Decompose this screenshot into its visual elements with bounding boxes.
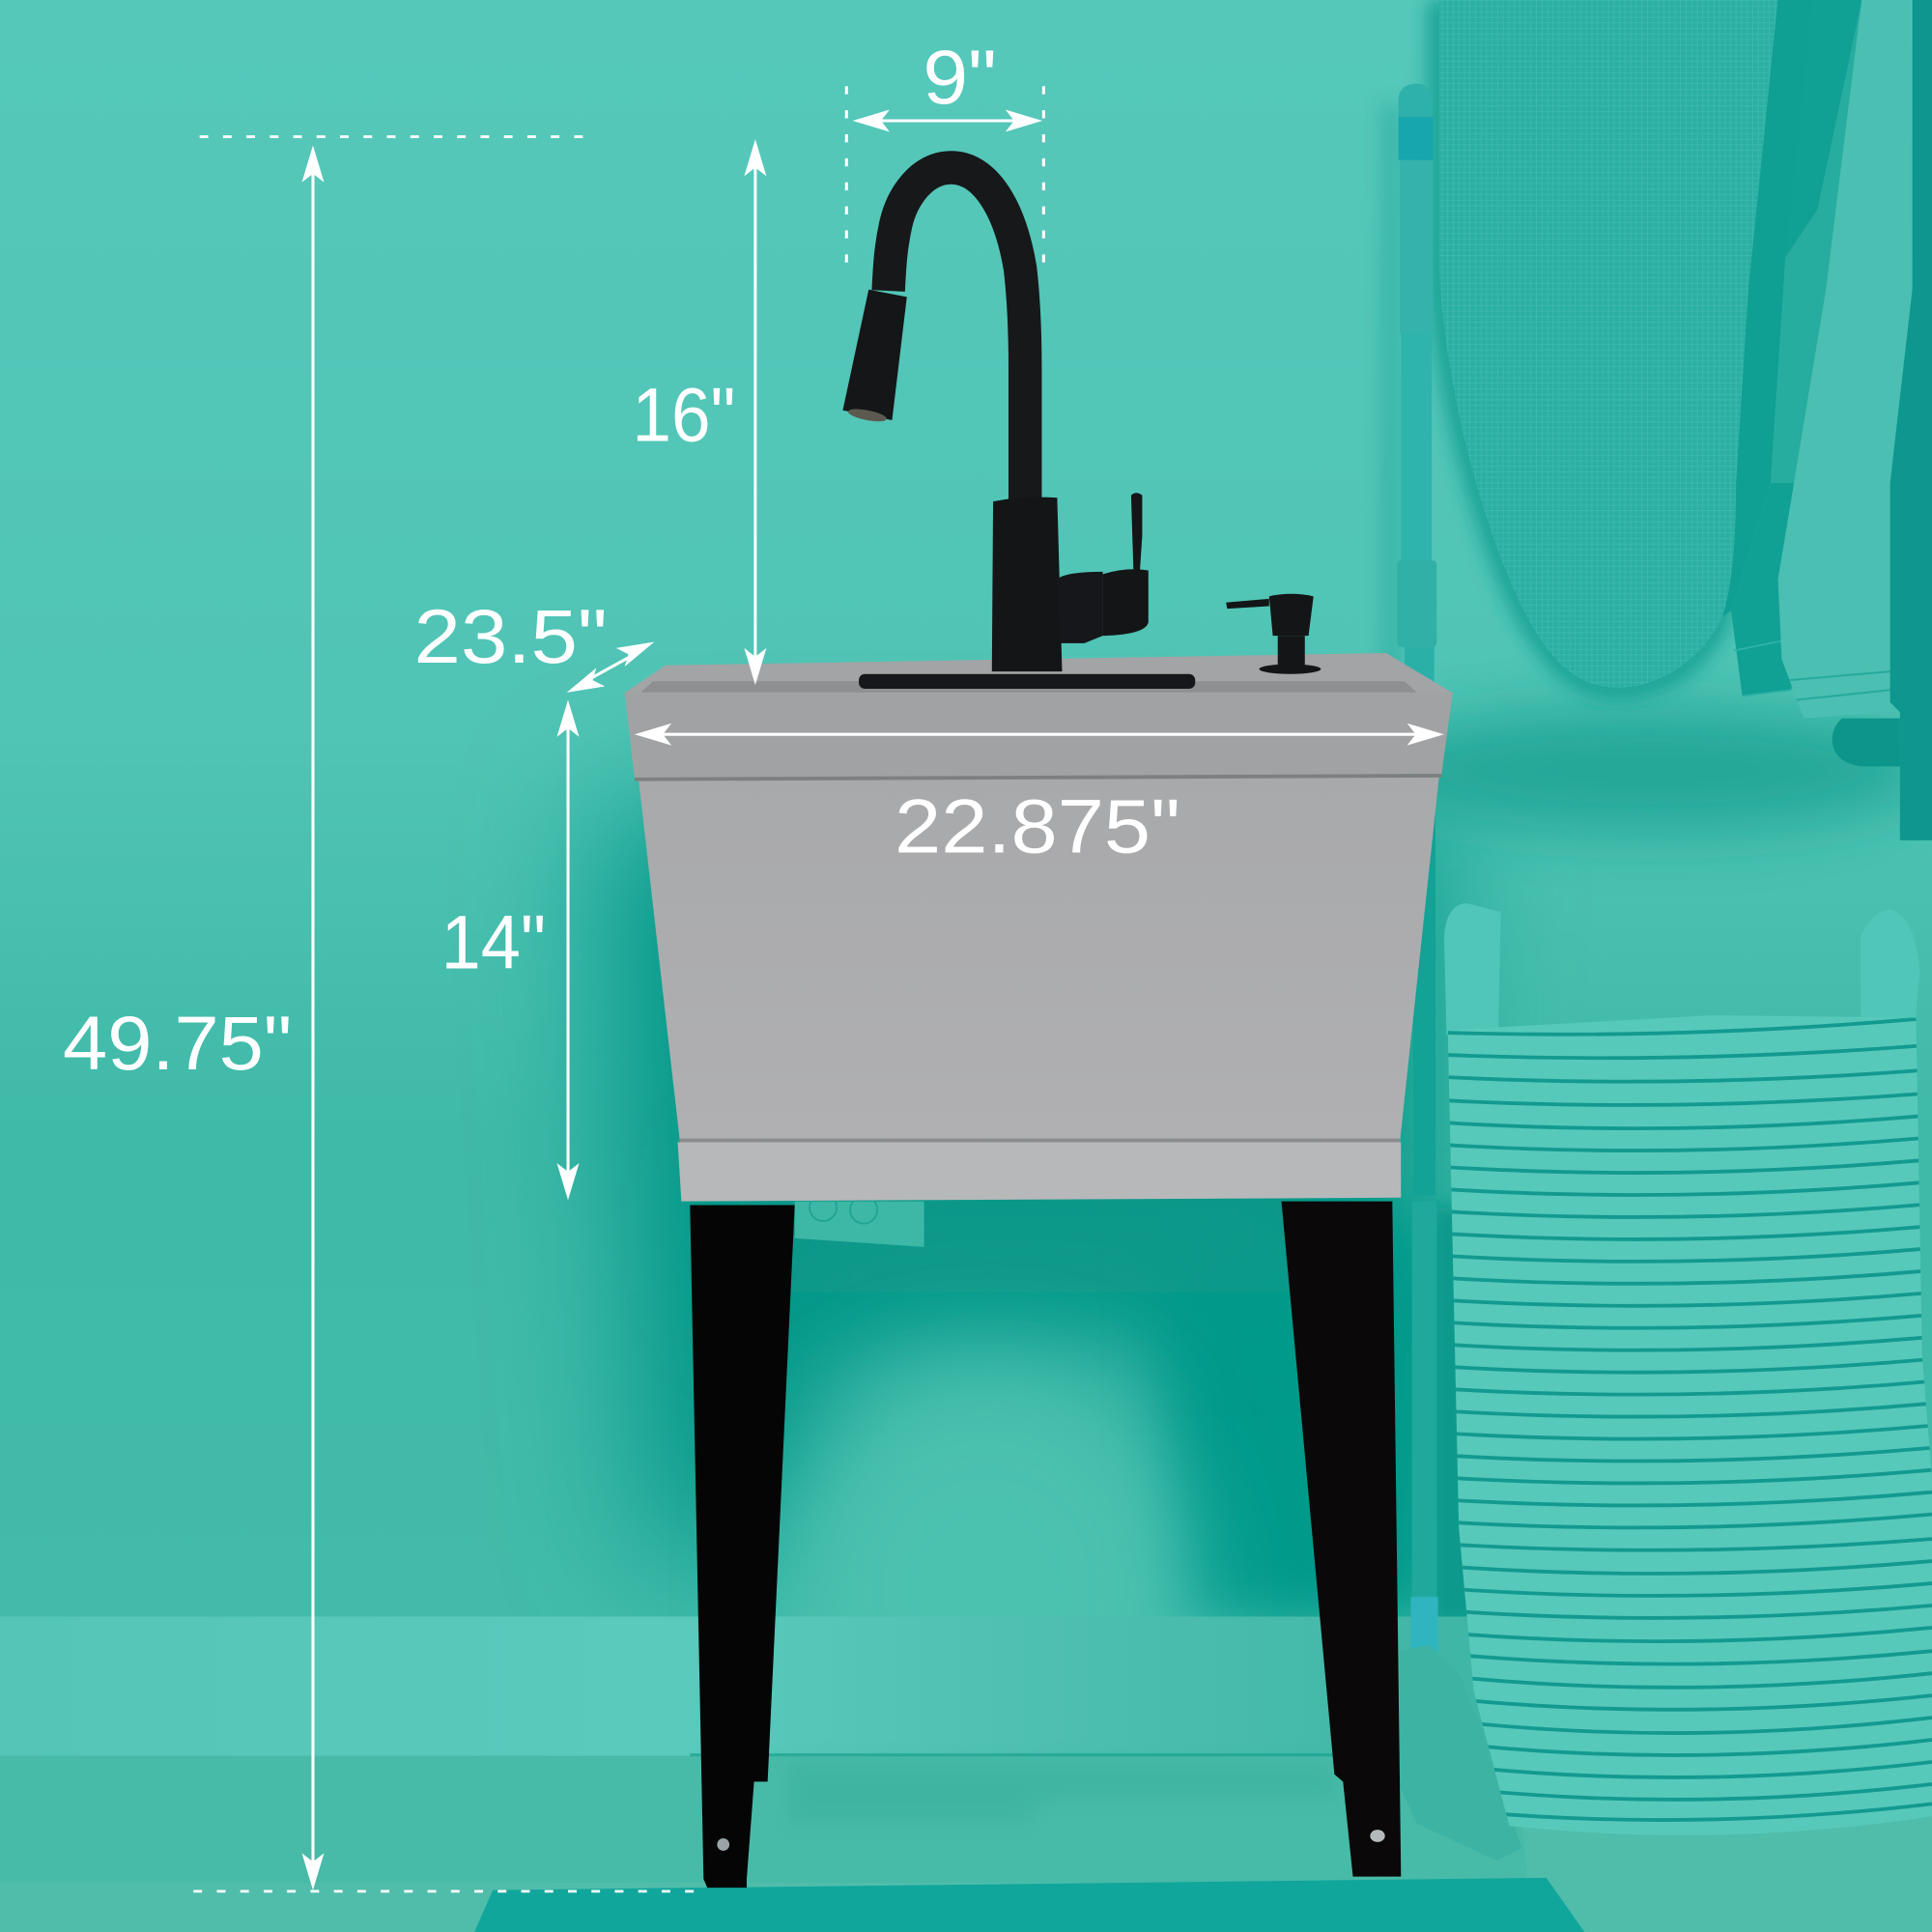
tub front rim — [625, 693, 1453, 779]
laundry hamper — [1441, 903, 1932, 1835]
dark shirt — [1833, 0, 1932, 840]
label 23.5: 23.5" — [414, 593, 608, 679]
faucet lever — [1131, 493, 1142, 573]
mop pole — [1380, 84, 1438, 1652]
label 9: 9" — [923, 34, 997, 120]
dimension: basin height 14 in — [441, 699, 579, 1200]
soap dispenser — [1226, 594, 1321, 674]
rug — [474, 1878, 1584, 1932]
faucet — [842, 167, 1195, 689]
hamper stripes — [1441, 1018, 1932, 1820]
dimension: faucet height 16 in — [632, 139, 766, 685]
faucet base column — [992, 497, 1062, 671]
label 22.875: 22.875" — [895, 783, 1180, 869]
dimension: depth 23.5 in — [414, 593, 654, 693]
tub bottom lip — [678, 1142, 1401, 1202]
hamper right handle — [1861, 909, 1919, 1029]
dimension: width 22.875 in — [635, 724, 1444, 869]
wall outlet — [795, 1194, 924, 1247]
mop head — [1400, 1645, 1521, 1861]
deck plate — [859, 674, 1195, 689]
clothes shadow on wall — [1722, 0, 1817, 616]
tub body — [639, 777, 1439, 1144]
dimension: faucet reach 9 in — [846, 34, 1043, 265]
wall shadow behind sink — [604, 708, 1932, 1799]
right leg screw — [1370, 1830, 1385, 1842]
left leg — [690, 1205, 795, 1888]
label 49.75: 49.75" — [63, 1000, 292, 1086]
ironing board — [1427, 0, 1786, 700]
pull-down spray head — [842, 290, 907, 420]
left leg screw — [717, 1838, 729, 1851]
towel on hanger — [1778, 0, 1913, 719]
faucet handle body — [1057, 572, 1103, 643]
faucet neck — [889, 167, 1025, 502]
label 16: 16" — [632, 372, 735, 458]
jeans on hanger — [1731, 0, 1861, 696]
dimension: overall height 49.75 in — [63, 137, 705, 1891]
sink legs — [690, 1202, 1401, 1888]
tub top deck — [623, 653, 1454, 694]
baseboard — [0, 1616, 1491, 1756]
hamper body — [1448, 1015, 1932, 1835]
floor — [0, 1753, 1932, 1932]
label 14: 14" — [441, 899, 546, 985]
sink tub — [623, 653, 1454, 1202]
hamper left handle — [1444, 903, 1501, 1035]
right leg — [1282, 1202, 1401, 1877]
